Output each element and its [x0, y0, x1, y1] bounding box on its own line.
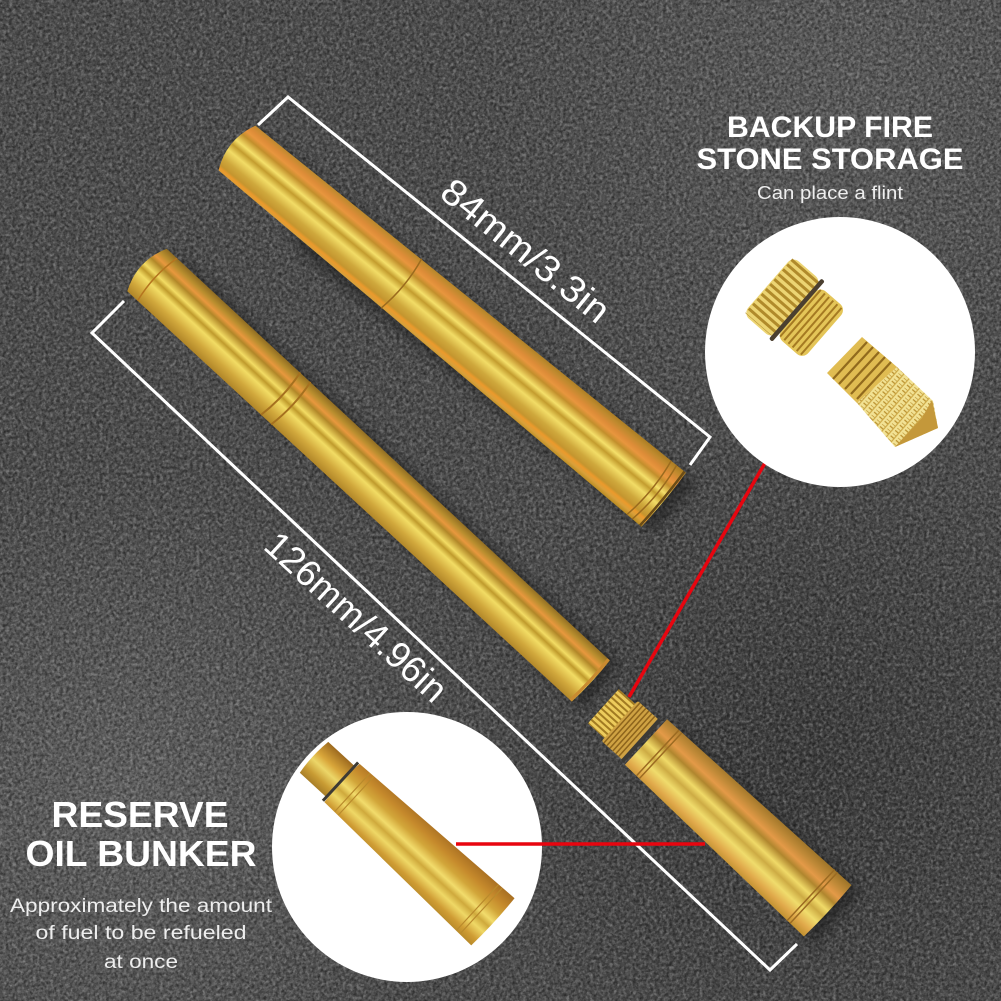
- caption: approximate fuel amount: of fuel to be refueled: [36, 923, 246, 944]
- heading: backup fire stone storage: STONE STORAGE: [696, 143, 964, 176]
- heading: reserve oil bunker: [26, 794, 256, 874]
- caption: approximate fuel amount: [10, 896, 273, 973]
- tube shadows: [175, 132, 860, 944]
- dimension line: 84mm: [258, 97, 710, 465]
- caption: approximate fuel amount: Approximately the amount: [10, 896, 273, 917]
- callout line to oil bunker: [456, 842, 705, 846]
- opened tube with knurled plug: [585, 685, 852, 937]
- caption: can place a flint: Can place a flint: [757, 183, 903, 203]
- heading: reserve oil bunker: OIL BUNKER: [26, 833, 256, 874]
- pointed knurled part: [827, 337, 938, 447]
- callout circle: backup fire stone storage: [705, 217, 975, 487]
- dimension line: 126mm: [92, 301, 797, 970]
- callout line to flint storage: [629, 463, 765, 697]
- short brass tube: [209, 117, 687, 527]
- tube body: [622, 716, 852, 937]
- dimension label: 84mm/3.3in: 84mm/3.3in: [433, 170, 618, 331]
- heading: backup fire stone storage: BACKUP FIRE: [727, 111, 933, 144]
- dimension label: 126mm/4.96in: 126mm/4.96in: [257, 524, 456, 710]
- heading: backup fire stone storage: [696, 111, 964, 176]
- knurled plug head: [585, 685, 661, 762]
- callout circle: reserve oil bunker: [272, 712, 542, 982]
- inset tube: [291, 733, 515, 946]
- heading: reserve oil bunker: RESERVE: [52, 794, 228, 835]
- threaded cap part: [742, 255, 851, 364]
- caption: approximate fuel amount: at once: [104, 952, 178, 973]
- long brass tube: [122, 244, 611, 703]
